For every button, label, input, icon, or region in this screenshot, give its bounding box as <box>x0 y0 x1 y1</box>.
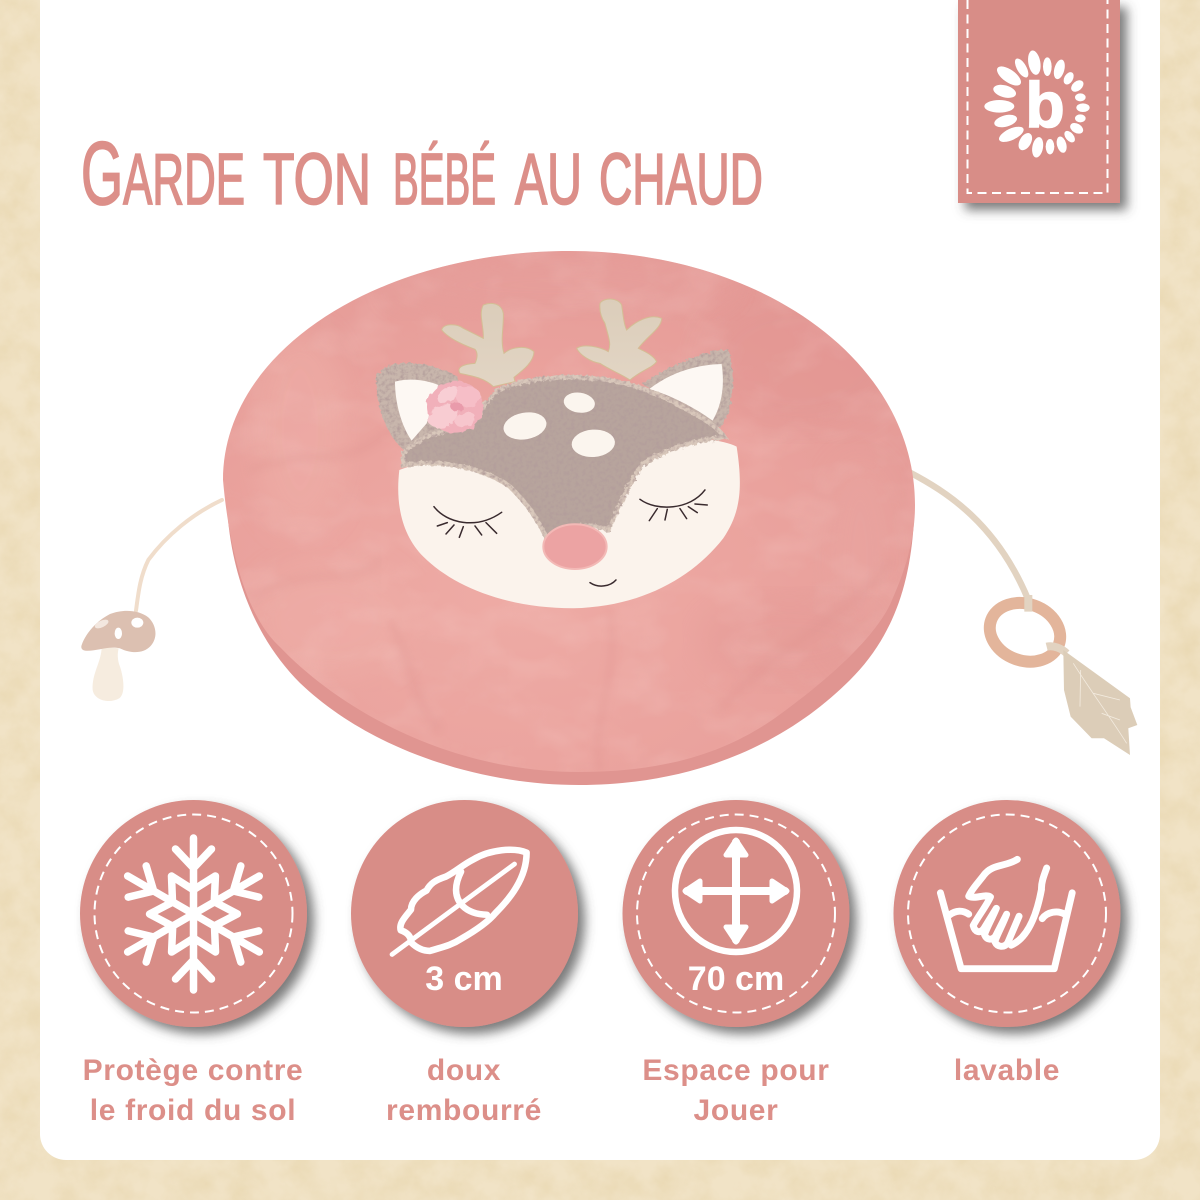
caption: Protège contre <box>83 1054 303 1087</box>
left antler <box>442 303 534 387</box>
caption: rembourré <box>386 1094 542 1127</box>
caption: le froid du sol <box>90 1094 296 1127</box>
leaf <box>1063 650 1137 755</box>
right antler <box>577 299 662 380</box>
title: TON <box>263 140 371 220</box>
mat lower edge <box>228 520 914 785</box>
title <box>81 123 763 223</box>
mat top cushion <box>223 251 915 776</box>
fur spots <box>501 391 616 458</box>
caption: Jouer <box>694 1094 778 1127</box>
feature: washable <box>894 800 1120 1087</box>
flower <box>424 381 483 433</box>
cream muzzle <box>398 437 740 608</box>
left string and mushroom toy <box>81 500 222 701</box>
deer face <box>376 299 740 608</box>
icon: feather <box>392 850 527 954</box>
value: 70 cm <box>688 960 784 998</box>
feature: snowflake <box>80 800 307 1127</box>
logo <box>984 49 1090 158</box>
icon: snowflake <box>117 838 270 990</box>
play mat <box>223 251 915 785</box>
mushroom <box>81 611 155 701</box>
brand tag <box>958 0 1120 203</box>
icon: ring with four arrows <box>675 830 797 952</box>
wooden ring <box>981 593 1069 671</box>
circle badge <box>622 800 850 1027</box>
value: 3 cm <box>425 960 503 998</box>
nose <box>543 524 607 569</box>
feature: feather <box>351 800 578 1127</box>
logo: b <box>1025 69 1065 141</box>
left ear <box>376 363 463 451</box>
eyes <box>434 490 707 537</box>
cord loop <box>1028 595 1067 653</box>
title: GARDE <box>81 123 245 223</box>
title: AU <box>515 140 582 220</box>
icon: hand wash basin <box>940 859 1072 969</box>
circle badge <box>80 800 307 1027</box>
caption: doux <box>427 1054 501 1087</box>
right string, wooden ring and leaf toy <box>908 472 1137 755</box>
fur forehead <box>403 377 724 538</box>
right ear <box>643 349 733 427</box>
title: BÉBÉ <box>393 140 496 220</box>
smile <box>590 580 616 586</box>
feature: play space <box>622 800 850 1127</box>
title: CHAUD <box>599 140 763 220</box>
circle badge <box>351 800 578 1027</box>
circle badge <box>894 800 1120 1027</box>
caption: lavable <box>954 1054 1060 1087</box>
caption: Espace pour <box>642 1054 830 1087</box>
